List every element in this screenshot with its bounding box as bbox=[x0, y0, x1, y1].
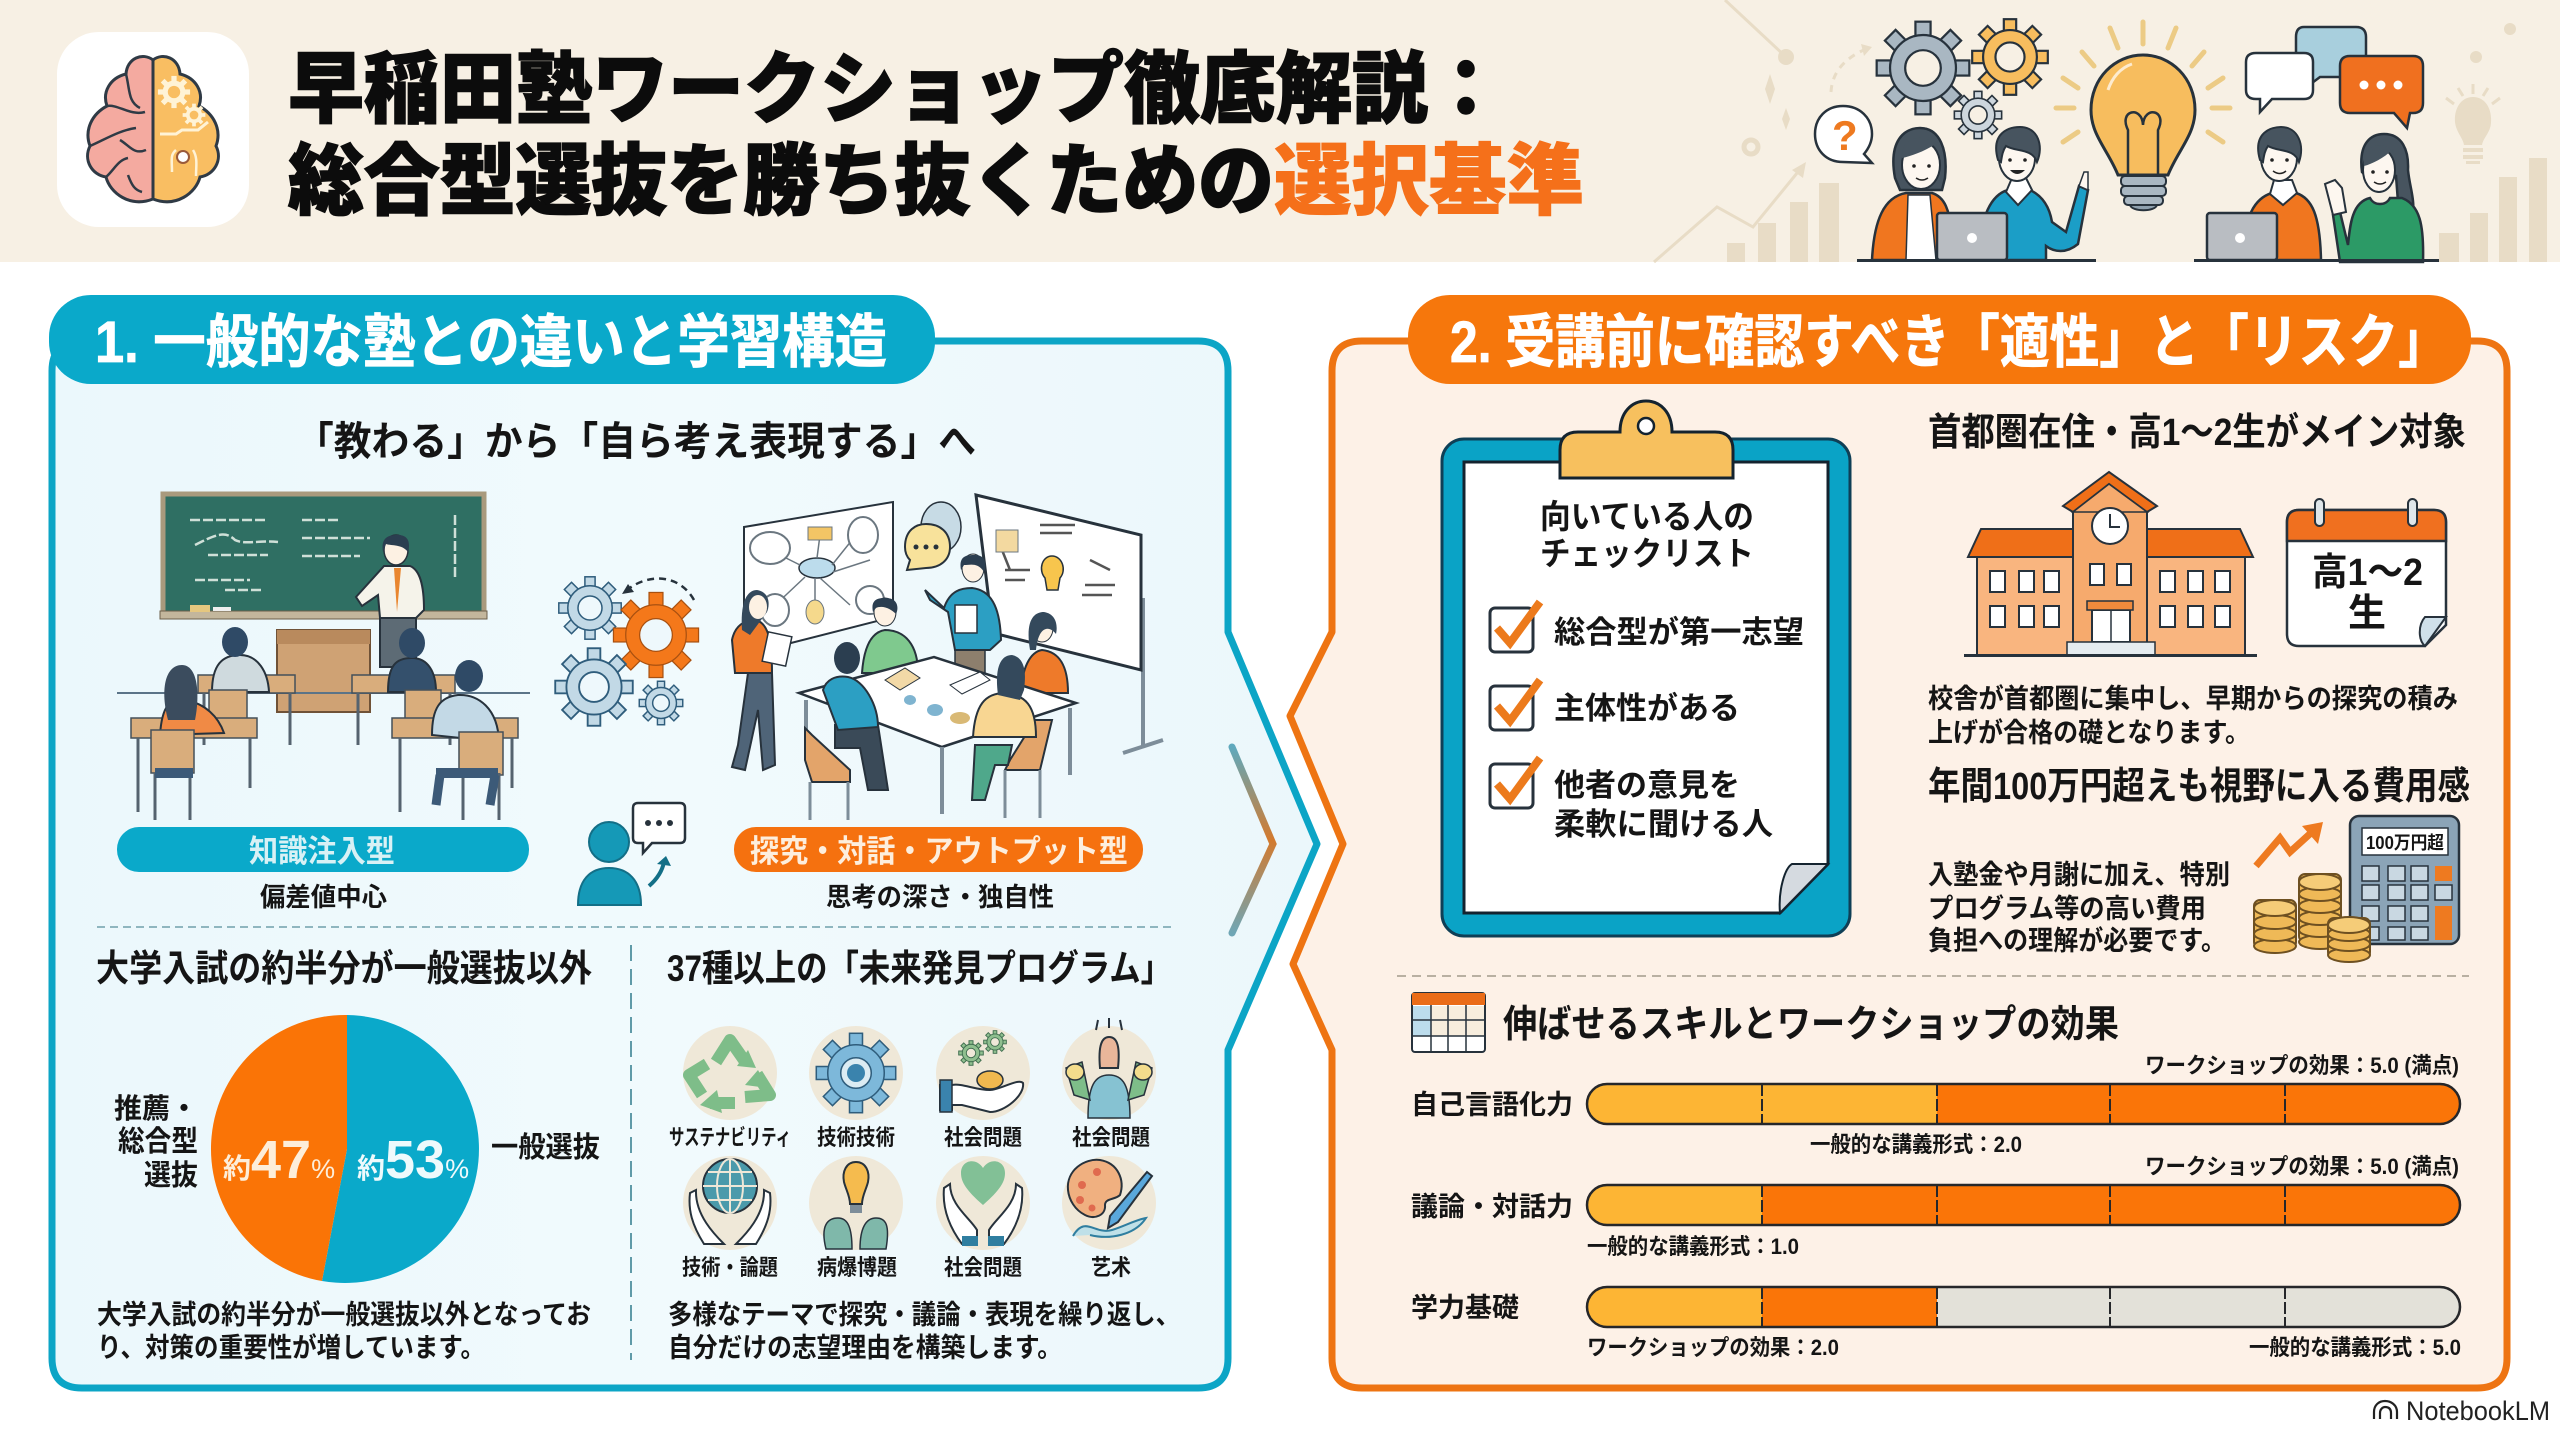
body text: cost bbox=[1928, 860, 2230, 956]
icon: calendar: 生 bbox=[2348, 593, 2386, 635]
teacher bbox=[356, 535, 424, 667]
pie legend: recommendation and comprehensive bbox=[114, 1093, 198, 1192]
icon labels: 社会問題 bbox=[944, 1125, 1022, 1150]
clipboard checklist bbox=[1442, 401, 1850, 936]
body text: admissions: 大学入試の約半分が一般選抜以外となってお bbox=[97, 1299, 591, 1330]
clipboard checklist: チェックリスト bbox=[1540, 535, 1754, 572]
label pill: inquiry and dialogue: 探究・対話・アウトプット型 bbox=[750, 834, 1128, 869]
skill chart: academic basics bbox=[1411, 1287, 2461, 1360]
chalkboard bbox=[160, 494, 487, 619]
skill chart: discussion: ワークショップの効果：5.0 (満点) bbox=[2145, 1154, 2459, 1179]
icon labels: 技術・論題 bbox=[682, 1255, 778, 1280]
pie label: 53 percent: 約53% bbox=[357, 1130, 469, 1190]
sub-heading: programs: 37種以上の「未来発見プログラム」 bbox=[667, 948, 1172, 989]
logo: brain icon bbox=[57, 32, 249, 227]
panel 1 heading pill: 1. 一般的な塾との違いと学習構造 bbox=[95, 310, 887, 375]
caption: depth of thought: 思考の深さ・独自性 bbox=[826, 882, 1054, 912]
divider bbox=[1397, 975, 2469, 977]
icon: idea bulb with people bbox=[809, 1156, 903, 1250]
skill chart: academic basics: ワークショップの効果：2.0 bbox=[1587, 1335, 1839, 1360]
body text: campus concentration bbox=[1928, 683, 2458, 748]
icon: calculator, coins and rising arrow bbox=[2254, 816, 2459, 962]
title: 総合型選抜を勝ち抜くための bbox=[288, 137, 1274, 225]
skill chart: discussion: 議論・対話力 bbox=[1411, 1192, 1573, 1222]
body text: cost: 入塾金や月謝に加え、特別 bbox=[1928, 860, 2230, 890]
icon: person speaking bbox=[578, 803, 685, 905]
table bbox=[799, 657, 1076, 814]
person: woman in orange bbox=[1872, 128, 1950, 260]
icon: calendar bbox=[2287, 499, 2446, 646]
skill chart: academic basics: 学力基礎 bbox=[1411, 1293, 1519, 1323]
pie legend: recommendation and comprehensive: 選抜 bbox=[144, 1159, 198, 1192]
skill chart: self verbalization: ワークショップの効果：5.0 (満点) bbox=[2145, 1053, 2459, 1078]
icon: raised fists bbox=[1062, 1018, 1156, 1120]
sub-heading: skills: 伸ばせるスキルとワークショップの効果 bbox=[1503, 1004, 2119, 1046]
icon labels: 技術技術 bbox=[817, 1125, 895, 1150]
header band bbox=[0, 0, 2560, 262]
pie chart bbox=[211, 1015, 479, 1283]
check item 3: 柔軟に聞ける人 bbox=[1554, 807, 1773, 842]
seated people in front bbox=[805, 642, 1052, 820]
check item 3 bbox=[1490, 758, 1773, 842]
caption: deviation-centred: 偏差値中心 bbox=[260, 882, 387, 912]
check item 1 bbox=[1490, 602, 1804, 652]
skill chart: self verbalization: 一般的な講義形式：2.0 bbox=[1810, 1132, 2022, 1157]
pie legend: recommendation and comprehensive: 推薦・ bbox=[114, 1093, 198, 1124]
icon: laptops and desks bbox=[1857, 213, 2439, 262]
panel 1 frame bbox=[52, 341, 1317, 1388]
icon: palette and pen bbox=[1062, 1156, 1156, 1250]
check item 2 bbox=[1490, 680, 1740, 730]
pie legend: recommendation and comprehensive: 総合型 bbox=[118, 1125, 198, 1158]
icon: interlocking gears bbox=[555, 577, 699, 726]
check item 1: 総合型が第一志望 bbox=[1554, 615, 1804, 650]
icon: globe in hands bbox=[683, 1156, 777, 1250]
person: man in orange bbox=[2242, 127, 2321, 260]
students and desks bbox=[131, 627, 518, 820]
icon: calendar: 高1〜2 bbox=[2312, 552, 2423, 594]
header background decoration bbox=[1654, 0, 2547, 262]
arrow: chevron between stages bbox=[1232, 747, 1273, 933]
standing man bbox=[925, 554, 1001, 680]
label pill: knowledge input bbox=[117, 827, 529, 872]
icon: gears bbox=[1877, 19, 2048, 139]
check item 3: 他者の意見を bbox=[1554, 768, 1740, 803]
icon grid: program themes bbox=[683, 1018, 1156, 1250]
icon labels: サステナビリティ bbox=[669, 1125, 791, 1150]
icon: gear technology bbox=[809, 1026, 903, 1120]
sub-heading: cost: 年間100万円超えも視野に入る費用感 bbox=[1928, 766, 2470, 808]
sub-heading: admissions share: 大学入試の約半分が一般選抜以外 bbox=[96, 948, 592, 989]
icon labels: 艺术 bbox=[1091, 1255, 1131, 1280]
title bbox=[288, 45, 1584, 225]
seated people behind table bbox=[862, 598, 1068, 693]
skill chart: self verbalization: 自己言語化力 bbox=[1411, 1090, 1573, 1120]
body text: cost: プログラム等の高い費用 bbox=[1928, 893, 2206, 924]
body text: admissions: り、対策の重要性が増しています。 bbox=[97, 1332, 485, 1363]
whiteboards bbox=[744, 495, 1163, 753]
clip bbox=[1560, 401, 1733, 478]
body text: campus concentration: 上げが合格の礎となります。 bbox=[1928, 717, 2250, 748]
icon: heart in hands bbox=[936, 1156, 1030, 1250]
icon: speech bubbles bbox=[2246, 27, 2423, 128]
icon: calculator, coins and rising arrow: 100万円超 bbox=[2366, 833, 2444, 853]
title: 早稲田塾ワークショップ徹底解説： bbox=[288, 45, 1504, 133]
illustration: lecture classroom bbox=[117, 494, 530, 820]
panel 2 frame bbox=[1290, 341, 2507, 1388]
icon: hand with gears bbox=[936, 1026, 1030, 1120]
icon: question bubble: ? bbox=[1832, 112, 1858, 159]
icon: question bubble bbox=[1815, 106, 1872, 163]
pie label: 47 percent: 約47% bbox=[223, 1130, 335, 1190]
speech bubbles bbox=[905, 502, 961, 570]
sub-heading: learning shift: 「教わる」から「自ら考え表現する」へ bbox=[296, 420, 976, 464]
body text: programs: 自分だけの志望理由を構築します。 bbox=[668, 1333, 1062, 1363]
skill chart: self verbalization bbox=[1411, 1053, 2460, 1157]
skill chart: academic basics: 一般的な講義形式：5.0 bbox=[2249, 1335, 2461, 1360]
label pill: knowledge input: 知識注入型 bbox=[249, 834, 395, 869]
watermark: NotebookLM: NotebookLM bbox=[2406, 1396, 2550, 1426]
icon labels bbox=[669, 1125, 1150, 1280]
header illustration: team with gears and light bulb bbox=[1815, 19, 2439, 262]
pie legend: general selection: 一般選抜 bbox=[491, 1131, 600, 1164]
panel 1 heading pill bbox=[49, 295, 935, 384]
standing woman bbox=[732, 590, 792, 770]
panel 2 heading pill bbox=[1408, 295, 2471, 384]
icon: recycling bbox=[683, 1026, 777, 1120]
icon: school building bbox=[1964, 472, 2257, 657]
person: woman in green bbox=[2325, 134, 2423, 262]
illustration: group workshop bbox=[732, 495, 1163, 820]
body text: programs: 多様なテーマで探究・議論・表現を繰り返し、 bbox=[668, 1300, 1180, 1330]
icon: table bbox=[1412, 993, 1485, 1052]
body text: cost: 負担への理解が必要です。 bbox=[1928, 925, 2226, 956]
podium bbox=[277, 630, 370, 712]
sub-heading: target audience: 首都圏在住・高1〜2生がメイン対象 bbox=[1928, 412, 2466, 454]
check item 2: 主体性がある bbox=[1554, 691, 1740, 726]
body text: admissions bbox=[97, 1299, 591, 1363]
body text: programs bbox=[668, 1300, 1180, 1363]
icon labels: 病爆博題 bbox=[817, 1255, 897, 1280]
skill chart: discussion: 一般的な講義形式：1.0 bbox=[1587, 1234, 1799, 1259]
person: man in blue pointing bbox=[1978, 127, 2088, 260]
icon labels: 社会問題 bbox=[944, 1255, 1022, 1280]
title: 選択基準 bbox=[1274, 137, 1584, 225]
icon: light bulb bbox=[2056, 22, 2230, 210]
skill chart: discussion bbox=[1411, 1154, 2460, 1259]
icon labels: 社会問題 bbox=[1072, 1125, 1150, 1150]
body text: campus concentration: 校舎が首都圏に集中し、早期からの探究の積み bbox=[1928, 683, 2458, 714]
divider bbox=[97, 926, 1171, 928]
checklist title: 向いている人の bbox=[1540, 498, 1754, 535]
